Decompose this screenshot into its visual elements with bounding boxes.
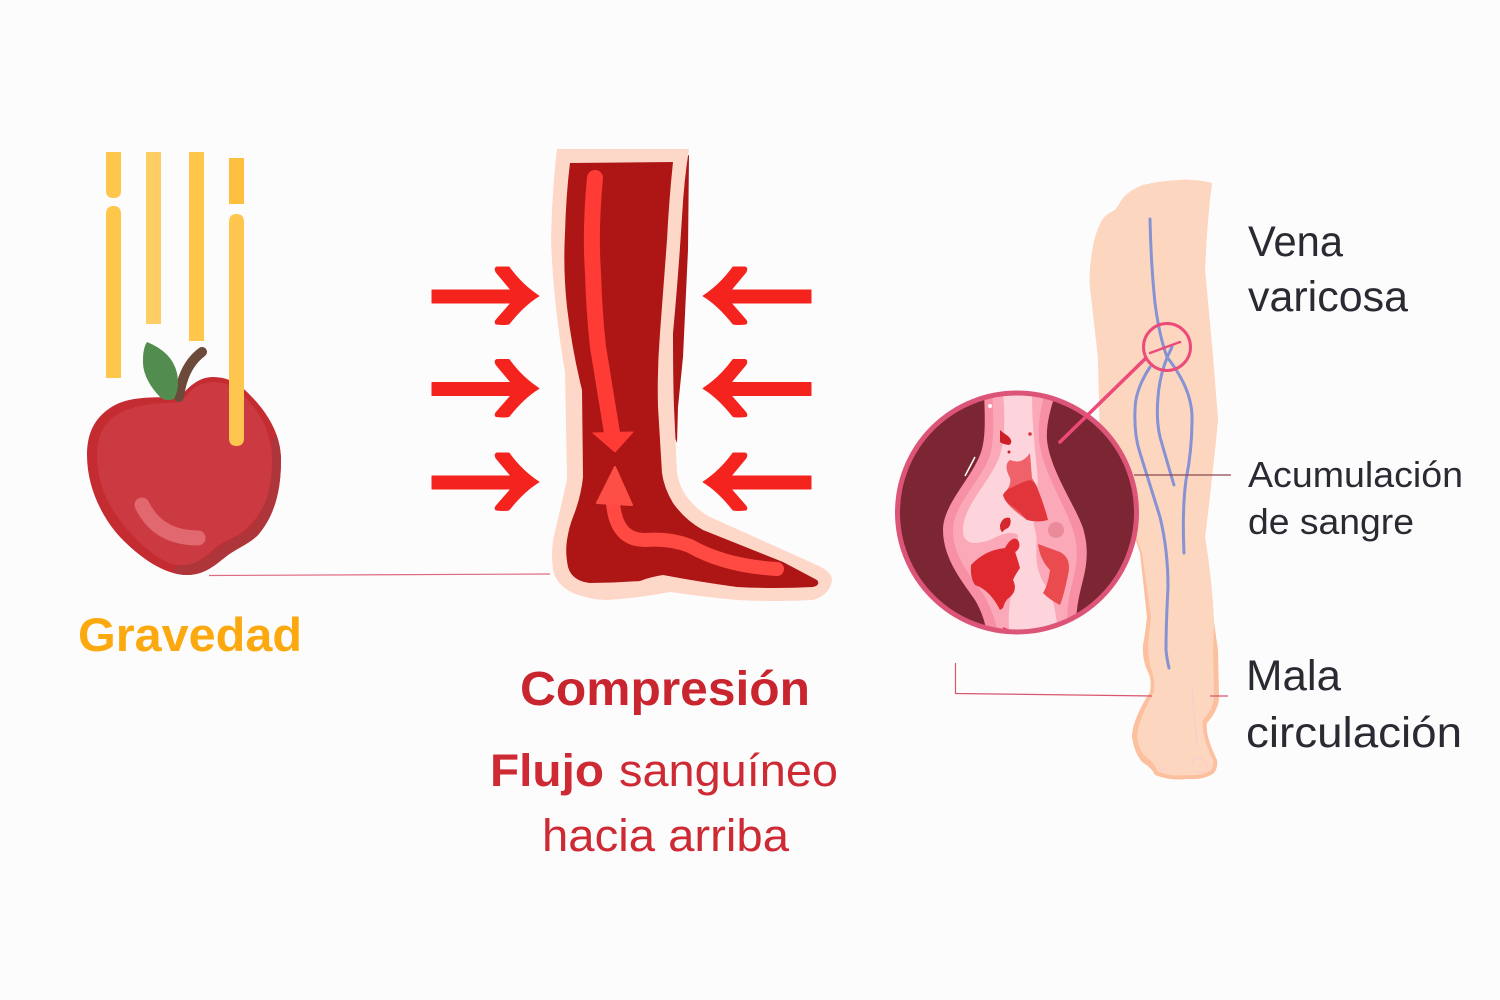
- infographic canvas: [80, 149, 1461, 852]
- text: flujo sanguíneo hacia arriba: hacia arriba: [542, 810, 790, 861]
- label: Vena varicosa: Vena: [1248, 218, 1343, 266]
- vessel wall: [943, 390, 1087, 634]
- magnified vessel lens: [898, 390, 1136, 640]
- blood clots: [1003, 453, 1048, 520]
- gravity line over apple: [229, 214, 244, 446]
- arrows: pressure from right: [703, 267, 811, 510]
- label: Mala circulación: [1246, 652, 1462, 757]
- icon: apple: [87, 342, 281, 575]
- icon: compressed leg: [551, 149, 832, 601]
- text: flujo sanguíneo hacia arriba: Flujo: [490, 745, 604, 796]
- leg outline: [1090, 180, 1219, 780]
- panel: vena varicosa: [898, 180, 1463, 780]
- icon: leg with varicose veins: [1090, 180, 1219, 780]
- arrow: flow down: [592, 178, 612, 433]
- arrow: flow up: [613, 503, 777, 569]
- arrows: pressure from left: [432, 267, 539, 510]
- gravity lines: [106, 152, 244, 378]
- label: Mala circulación: circulación: [1246, 709, 1462, 757]
- label: Mala circulación: Mala: [1246, 652, 1341, 700]
- connector: acumulación line: [1134, 474, 1231, 476]
- callout: magnifier pointer: [1060, 324, 1190, 442]
- text: flujo sanguíneo hacia arriba: sanguíneo: [619, 745, 838, 796]
- label: Vena varicosa: [1248, 218, 1408, 321]
- label: Acumulación de sangre: Acumulación: [1248, 454, 1463, 495]
- text: flujo sanguíneo hacia arriba: [490, 745, 838, 861]
- vessel lumen: [963, 392, 1058, 635]
- connector: apple to leg: [209, 574, 550, 576]
- label: Acumulación de sangre: de sangre: [1248, 501, 1414, 542]
- connector: mala circulación: [956, 663, 1228, 696]
- panel: compresión: [432, 149, 838, 861]
- veins: [1135, 219, 1192, 668]
- foot creases: [1158, 688, 1207, 772]
- label: Acumulación de sangre: [1248, 454, 1463, 542]
- heading: Gravedad: Gravedad: [78, 608, 302, 661]
- heading: Compresión: Compresión: [520, 663, 810, 716]
- panel: gravedad: [78, 152, 302, 661]
- label: Vena varicosa: varicosa: [1248, 273, 1408, 321]
